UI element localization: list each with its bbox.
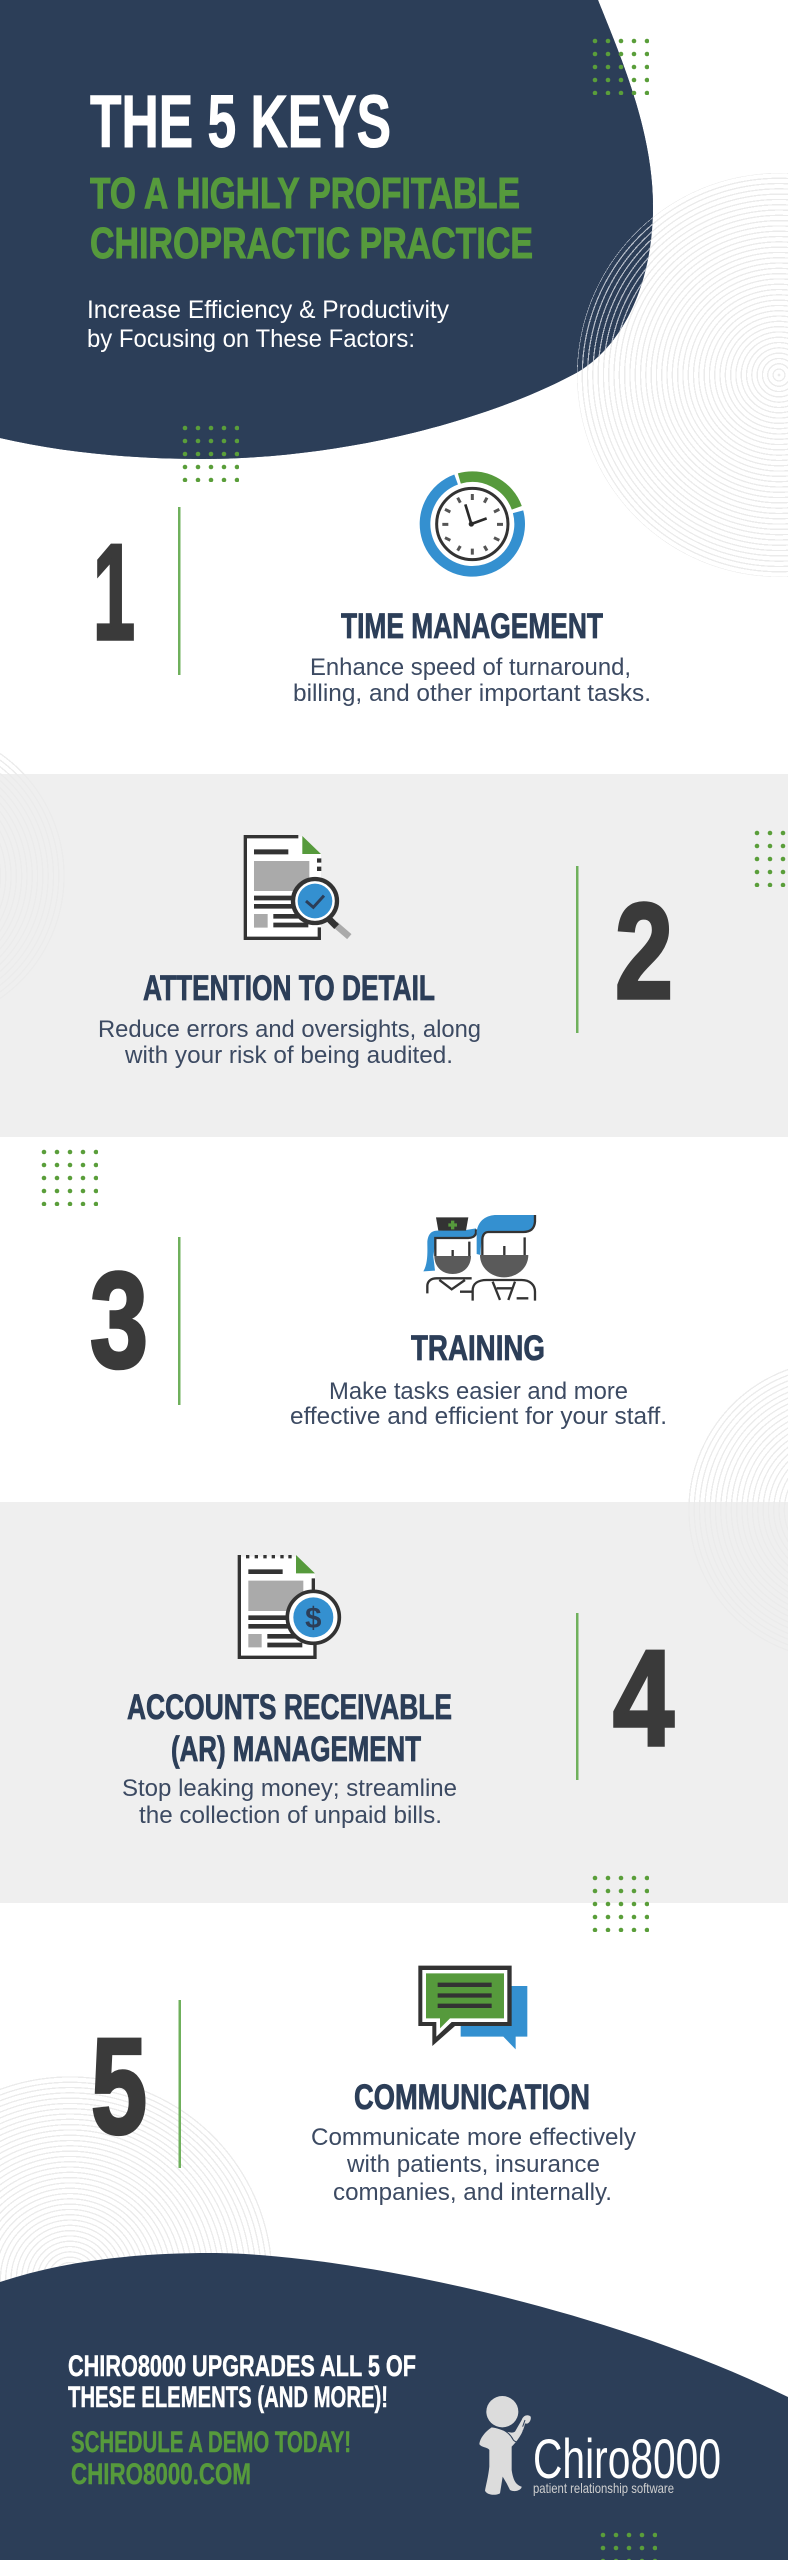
number 1: 1	[93, 516, 135, 668]
number 2: 2	[615, 875, 673, 1027]
logo tagline: patient relationship software	[533, 2480, 674, 2496]
body text: effective and efficient for your staff.	[290, 1403, 667, 1430]
logo figure	[479, 2396, 531, 2495]
panel band: accounts receivable background	[0, 1502, 788, 1903]
call to action: CHIRO8000.COM	[71, 2458, 251, 2491]
body text: companies, and internally.	[333, 2179, 612, 2206]
heading: TIME MANAGEMENT	[341, 607, 603, 646]
concentric rings: left of section 2	[0, 726, 65, 1026]
footer headline	[68, 2350, 416, 2414]
title: THE 5 KEYS	[90, 80, 391, 163]
concentric rings: right of section 4	[688, 1360, 788, 1660]
body text	[122, 1775, 457, 1829]
panel: attention to detail	[98, 830, 788, 1069]
intro line 1: Increase Efficiency & Productivity	[87, 296, 449, 324]
panel: training	[41, 1149, 667, 1430]
heading line 2: (AR) MANAGEMENT	[171, 1730, 421, 1769]
number 3: 3	[90, 1244, 148, 1396]
subtitle line 2: CHIROPRACTIC PRACTICE	[90, 219, 533, 268]
body text: Communicate more effectively	[311, 2124, 636, 2151]
heading: ATTENTION TO DETAIL	[143, 969, 435, 1008]
body text: the collection of unpaid bills.	[139, 1802, 442, 1829]
heading: COMMUNICATION	[354, 2078, 590, 2117]
body text: Enhance speed of turnaround,	[310, 654, 631, 681]
body text	[98, 1016, 481, 1069]
icon: invoice with dollar: $	[305, 1602, 321, 1635]
dots: header bottom	[182, 425, 239, 482]
icon: document with magnifier	[245, 836, 349, 938]
icon: invoice with dollar	[239, 1555, 339, 1657]
call to action: SCHEDULE A DEMO TODAY!	[71, 2426, 351, 2459]
rings over header blob	[0, 0, 653, 459]
footer blob	[0, 2253, 788, 2560]
body text: Stop leaking money; streamline	[122, 1775, 457, 1802]
footer headline: THESE ELEMENTS (AND MORE)!	[68, 2381, 388, 2414]
icon: clock	[425, 477, 520, 571]
heading line 1: ACCOUNTS RECEIVABLE	[127, 1688, 452, 1727]
concentric rings: bottom left	[0, 2076, 273, 2482]
green divider	[178, 1237, 180, 1405]
logo	[479, 2396, 721, 2496]
body text: with your risk of being audited.	[124, 1042, 453, 1069]
dots	[592, 1875, 649, 1932]
footer headline: CHIRO8000 UPGRADES ALL 5 OF	[68, 2350, 416, 2383]
panel: communication	[91, 1966, 636, 2206]
panel band: attention to detail background	[0, 774, 788, 1137]
body text: billing, and other important tasks.	[293, 680, 651, 707]
panel: time management	[93, 477, 651, 707]
logo wordmark: Chiro8000	[533, 2427, 721, 2490]
dots	[754, 830, 788, 887]
subtitle line 1: TO A HIGHLY PROFITABLE	[90, 169, 520, 218]
body text: Reduce errors and oversights, along	[98, 1016, 481, 1043]
panel: accounts receivable	[122, 1555, 674, 1932]
green divider	[178, 507, 180, 675]
intro line 2: by Focusing on These Factors:	[87, 325, 415, 353]
heading: TRAINING	[411, 1329, 545, 1368]
number 5: 5	[91, 2010, 147, 2162]
icon: nurse and doctor	[423, 1215, 536, 1301]
dots	[600, 2532, 657, 2560]
body text	[293, 654, 651, 707]
green divider	[576, 1613, 578, 1780]
green divider	[576, 866, 578, 1033]
green divider	[178, 2000, 181, 2168]
dots: header top	[592, 38, 649, 95]
call to action	[71, 2426, 351, 2491]
header text	[87, 80, 533, 353]
body text	[290, 1378, 667, 1430]
number 4: 4	[613, 1622, 674, 1774]
body text: with patients, insurance	[346, 2151, 600, 2178]
footer panel	[0, 2253, 788, 2560]
header blob	[0, 0, 653, 459]
concentric rings: top right	[577, 173, 788, 577]
body text: Make tasks easier and more	[329, 1378, 628, 1405]
dots	[41, 1149, 98, 1206]
icon: chat bubbles	[418, 1966, 527, 2049]
body text	[311, 2124, 636, 2206]
